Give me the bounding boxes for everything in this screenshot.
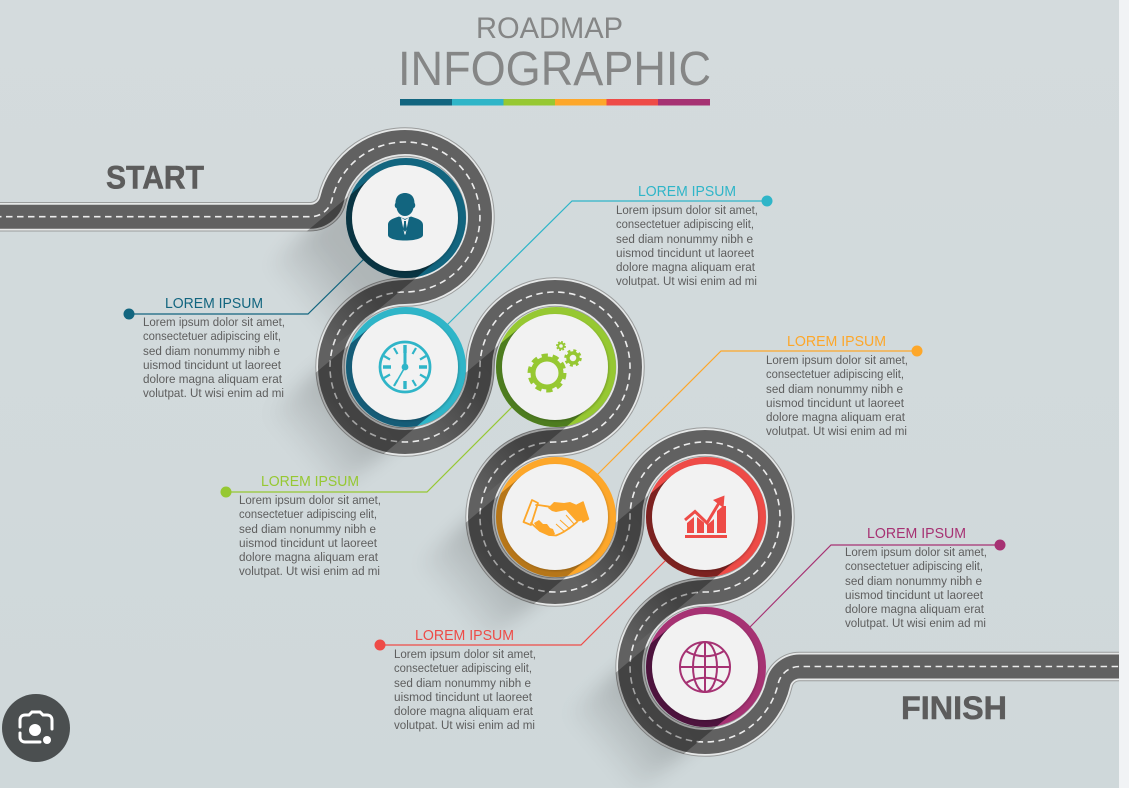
text block 3: volutpat. Ut wisi enim ad mi xyxy=(239,564,380,578)
text block 4: uismod tincidunt ut laoreet xyxy=(766,396,905,410)
finish label: FINISH xyxy=(901,690,1007,726)
text block 2 xyxy=(616,183,758,288)
disc 5 xyxy=(646,457,766,577)
text block 1: sed diam nonummy nibh e xyxy=(143,344,280,358)
text block 2: Lorem ipsum dolor sit amet, xyxy=(616,203,758,217)
text block 5: LOREM IPSUM xyxy=(415,627,514,644)
icon: gears xyxy=(530,342,580,390)
text block 2: volutpat. Ut wisi enim ad mi xyxy=(616,274,757,288)
start label: START xyxy=(106,160,204,196)
text block 5: sed diam nonummy nibh e xyxy=(394,676,531,690)
text block 2: consectetuer adipiscing elit, xyxy=(616,217,754,231)
text block 5: volutpat. Ut wisi enim ad mi xyxy=(394,718,535,732)
text block 6: dolore magna aliquam erat xyxy=(845,602,985,616)
text block 4: Lorem ipsum dolor sit amet, xyxy=(766,353,908,367)
text block 3: Lorem ipsum dolor sit amet, xyxy=(239,493,381,507)
text block 1: Lorem ipsum dolor sit amet, xyxy=(143,315,285,329)
icon: globe xyxy=(680,642,730,692)
icon: lens badge xyxy=(2,694,70,762)
connector 4 xyxy=(597,346,922,475)
title: ROADMAP xyxy=(476,12,623,45)
text block 4: sed diam nonummy nibh e xyxy=(766,382,903,396)
title xyxy=(398,12,711,96)
text block 3: consectetuer adipiscing elit, xyxy=(239,507,377,521)
text block 5: Lorem ipsum dolor sit amet, xyxy=(394,647,536,661)
text block 4 xyxy=(766,333,908,438)
road xyxy=(0,142,1119,742)
text block 1: LOREM IPSUM xyxy=(165,295,263,312)
road shadows xyxy=(306,196,717,754)
text block 1: consectetuer adipiscing elit, xyxy=(143,329,281,343)
disc 2 xyxy=(346,307,466,427)
text block 4: consectetuer adipiscing elit, xyxy=(766,367,904,381)
icon: businessman xyxy=(388,193,423,240)
title: INFOGRAPHIC xyxy=(398,43,711,96)
text block 3 xyxy=(239,473,381,578)
text block 6: Lorem ipsum dolor sit amet, xyxy=(845,545,987,559)
icon: handshake xyxy=(524,500,588,536)
connector 3 xyxy=(220,406,513,498)
text block 2: uismod tincidunt ut laoreet xyxy=(616,246,755,260)
text block 1: uismod tincidunt ut laoreet xyxy=(143,358,282,372)
colour bar xyxy=(400,99,710,106)
text block 5: dolore magna aliquam erat xyxy=(394,704,534,718)
text block 4: volutpat. Ut wisi enim ad mi xyxy=(766,424,907,438)
text block 3: dolore magna aliquam erat xyxy=(239,550,379,564)
text block 5: uismod tincidunt ut laoreet xyxy=(394,690,533,704)
text block 2: sed diam nonummy nibh e xyxy=(616,232,753,246)
text block 3: uismod tincidunt ut laoreet xyxy=(239,536,378,550)
text block 6: sed diam nonummy nibh e xyxy=(845,574,982,588)
text block 3: sed diam nonummy nibh e xyxy=(239,522,376,536)
text block 6: volutpat. Ut wisi enim ad mi xyxy=(845,616,986,630)
text block 6: uismod tincidunt ut laoreet xyxy=(845,588,984,602)
soft ground shadows xyxy=(264,177,739,788)
icon: growth chart xyxy=(685,496,727,538)
text block 2: dolore magna aliquam erat xyxy=(616,260,756,274)
text block 3: LOREM IPSUM xyxy=(261,473,359,490)
connector 6 xyxy=(750,540,1006,627)
text block 5: consectetuer adipiscing elit, xyxy=(394,661,532,675)
connector 2 xyxy=(447,196,772,325)
text block 1 xyxy=(143,295,285,400)
text block 6: LOREM IPSUM xyxy=(867,525,966,542)
text block 2: LOREM IPSUM xyxy=(638,183,736,200)
disc 3 xyxy=(496,307,616,427)
disc 6 xyxy=(646,607,766,727)
text block 1: dolore magna aliquam erat xyxy=(143,372,283,386)
text block 1: volutpat. Ut wisi enim ad mi xyxy=(143,386,284,400)
disc 1 xyxy=(346,158,466,278)
text block 4: dolore magna aliquam erat xyxy=(766,410,906,424)
text block 5 xyxy=(394,627,536,732)
text block 6: consectetuer adipiscing elit, xyxy=(845,559,983,573)
disc 4 xyxy=(496,457,616,577)
text block 6 xyxy=(845,525,987,630)
connector 1 xyxy=(124,258,365,320)
connector 5 xyxy=(374,560,666,650)
icon: clock xyxy=(380,342,430,392)
text block 4: LOREM IPSUM xyxy=(787,333,886,350)
